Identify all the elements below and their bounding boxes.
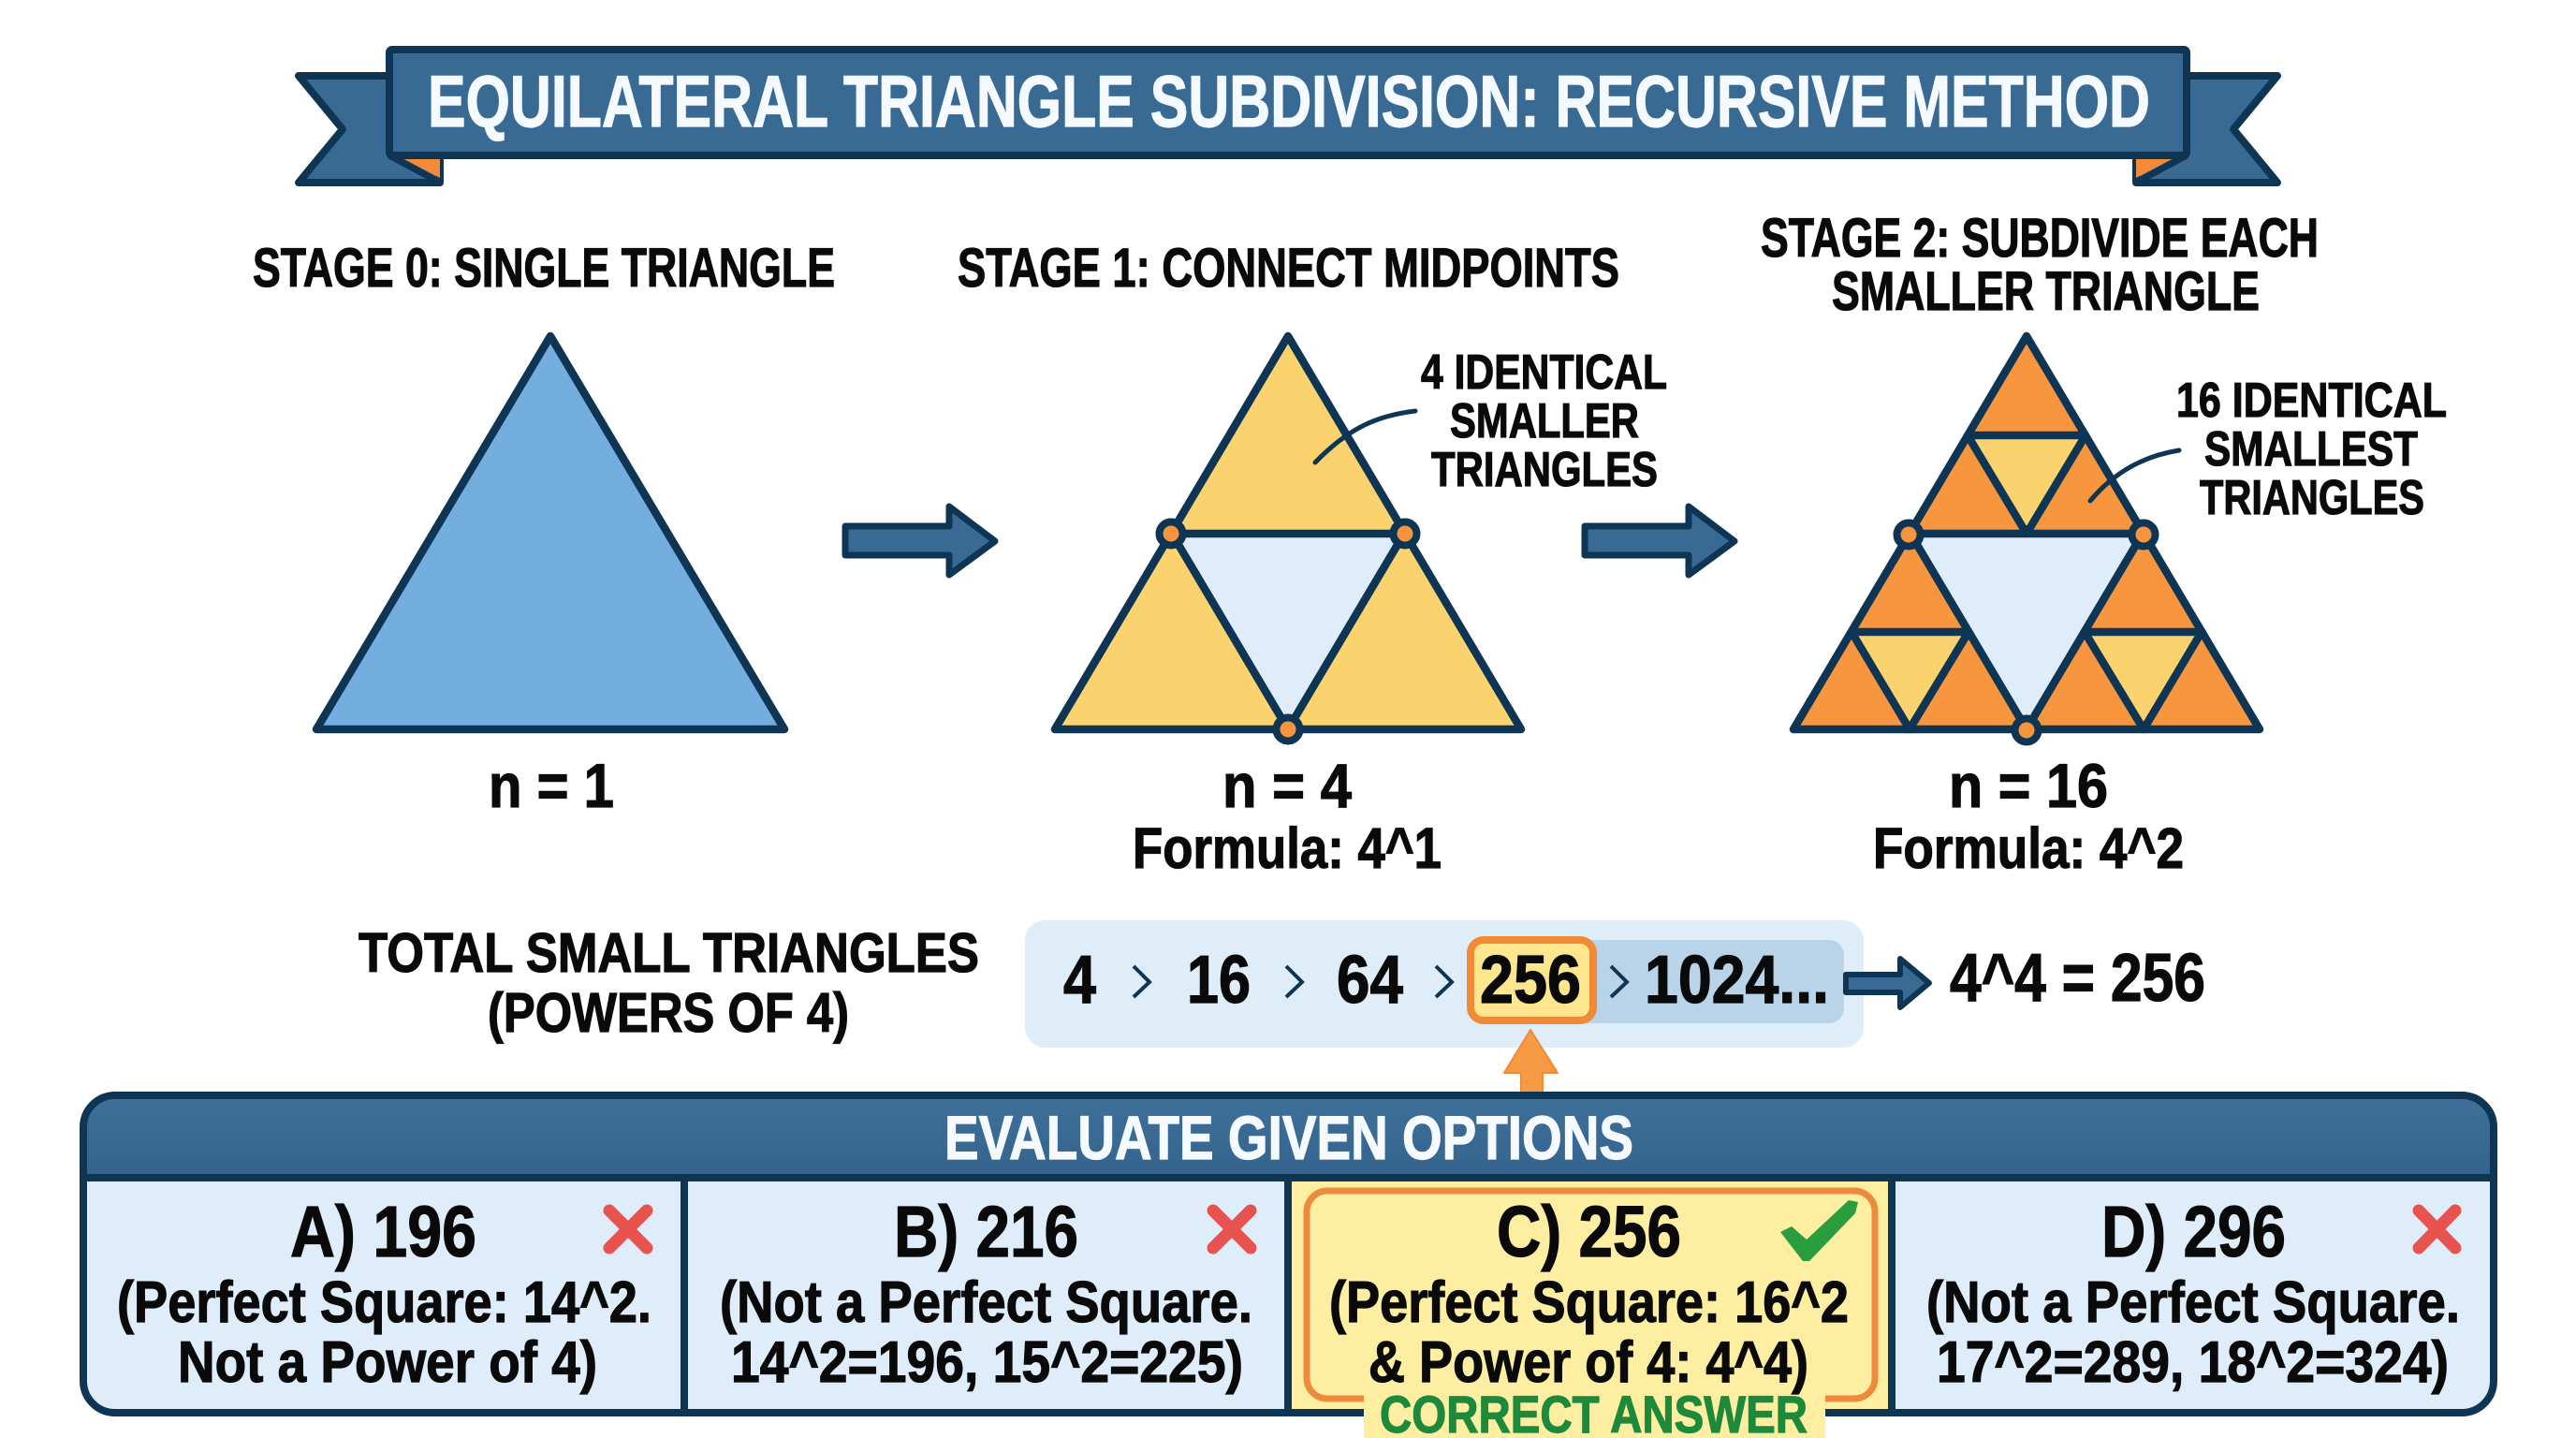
option B [720,1192,1252,1395]
left yellow triangle [1852,632,1969,729]
panel outline and dividers [83,1095,2494,1413]
sequence values [1063,943,1829,1018]
top yellow triangle [1968,435,2086,534]
stage 2 callout: 16 IDENTICAL [2176,374,2447,428]
header title: EVALUATE GIVEN OPTIONS [944,1103,1633,1172]
banner body [389,50,2187,155]
arrow: sequence to result [1846,959,1929,1007]
sequence values: 1024... [1645,943,1829,1018]
option C background [1292,1178,1889,1413]
option A: Not a Power of 4) [178,1330,597,1395]
option D: D) 296 [2101,1192,2286,1272]
stage 1 callout: TRIANGLES [1431,443,1658,497]
right yellow triangle [2085,632,2202,729]
stage 1 triangle [1055,336,1521,741]
stage 2 heading: STAGE 2: SUBDIVIDE EACH [1761,208,2319,269]
sequence label [359,922,979,1044]
option C: correct: (Perfect Square: 16^2 [1329,1270,1849,1335]
option C: correct: & Power of 4: 4^4) [1368,1330,1808,1395]
stage 1 count and formula: n = 4 [1222,751,1352,820]
stage 1 count and formula [1133,751,1442,880]
sequence values: 16 [1187,943,1251,1018]
stage 2 triangle [1793,336,2260,741]
options panel [83,1095,2494,1438]
stage 1 heading: STAGE 1: CONNECT MIDPOINTS [958,238,1619,299]
sequence values: 256 [1480,943,1581,1018]
panel header [83,1095,2494,1178]
option D: (Not a Perfect Square. [1926,1270,2460,1335]
option A: (Perfect Square: 14^2. [117,1270,651,1335]
stage 2 callout [2176,374,2447,525]
option B: (Not a Perfect Square. [720,1270,1252,1335]
stage 1 callout [1421,345,1667,497]
icon: red cross [609,1211,647,1248]
sequence values: 64 [1337,943,1403,1018]
icon: green check [1780,1200,1858,1261]
stage 1 count and formula: Formula: 4^1 [1133,816,1442,880]
option B: B) 216 [894,1192,1078,1272]
stage 2 count and formula [1873,751,2184,880]
stage 0 triangle [316,336,784,729]
option B: 14^2=196, 15^2=225) [731,1330,1243,1395]
icon: red cross [1213,1211,1251,1248]
stage 1 callout: 4 IDENTICAL [1421,345,1667,400]
result equation: 4^4 = 256 [1950,941,2205,1016]
midpoint nodes [1159,522,1417,741]
option C: correct: C) 256 [1497,1192,1681,1272]
powers of 4 sequence strip [1025,920,1864,1048]
chevrons [1134,966,1627,997]
sequence label: (POWERS OF 4) [488,982,849,1044]
stage 0 count: n = 1 [489,751,614,820]
arrow: stage 0 to stage 1 [845,506,995,575]
option A: A) 196 [290,1192,476,1272]
icon: red cross [2419,1211,2455,1248]
option D [1926,1192,2460,1395]
continuation segment [1554,940,1844,1023]
stage 2 count and formula: Formula: 4^2 [1873,816,2184,880]
panel frame [83,1095,2494,1413]
highlighted 256 box [1471,940,1593,1020]
leader line [2090,450,2179,501]
highlight outline [1307,1191,1875,1399]
stage 2 count and formula: n = 16 [1949,751,2108,820]
option C: correct [1307,1191,1875,1438]
stage 2 heading [1761,208,2319,322]
midpoint nodes [1896,522,2155,741]
stage 2 heading: SMALLER TRIANGLE [1832,261,2260,322]
option A [117,1192,651,1395]
stage 2 callout: TRIANGLES [2200,471,2424,525]
option D: 17^2=289, 18^2=324) [1937,1330,2449,1395]
stage 0 heading: STAGE 0: SINGLE TRIANGLE [253,238,835,299]
stage 1 callout: SMALLER [1450,394,1639,448]
stage 2 callout: SMALLEST [2204,422,2418,477]
sequence label: TOTAL SMALL TRIANGLES [359,922,979,984]
ribbon tail: right [2134,76,2277,183]
strip background [1025,920,1864,1048]
title text: EQUILATERAL TRIANGLE SUBDIVISION: RECURSIVE METHOD [428,60,2150,142]
title banner [299,50,2277,183]
orange pointer arrow [1504,1030,1558,1093]
leader line [1315,411,1415,462]
arrow: stage 1 to stage 2 [1585,506,1734,575]
sequence values: 4 [1063,943,1096,1018]
ribbon tail: left [299,76,442,183]
